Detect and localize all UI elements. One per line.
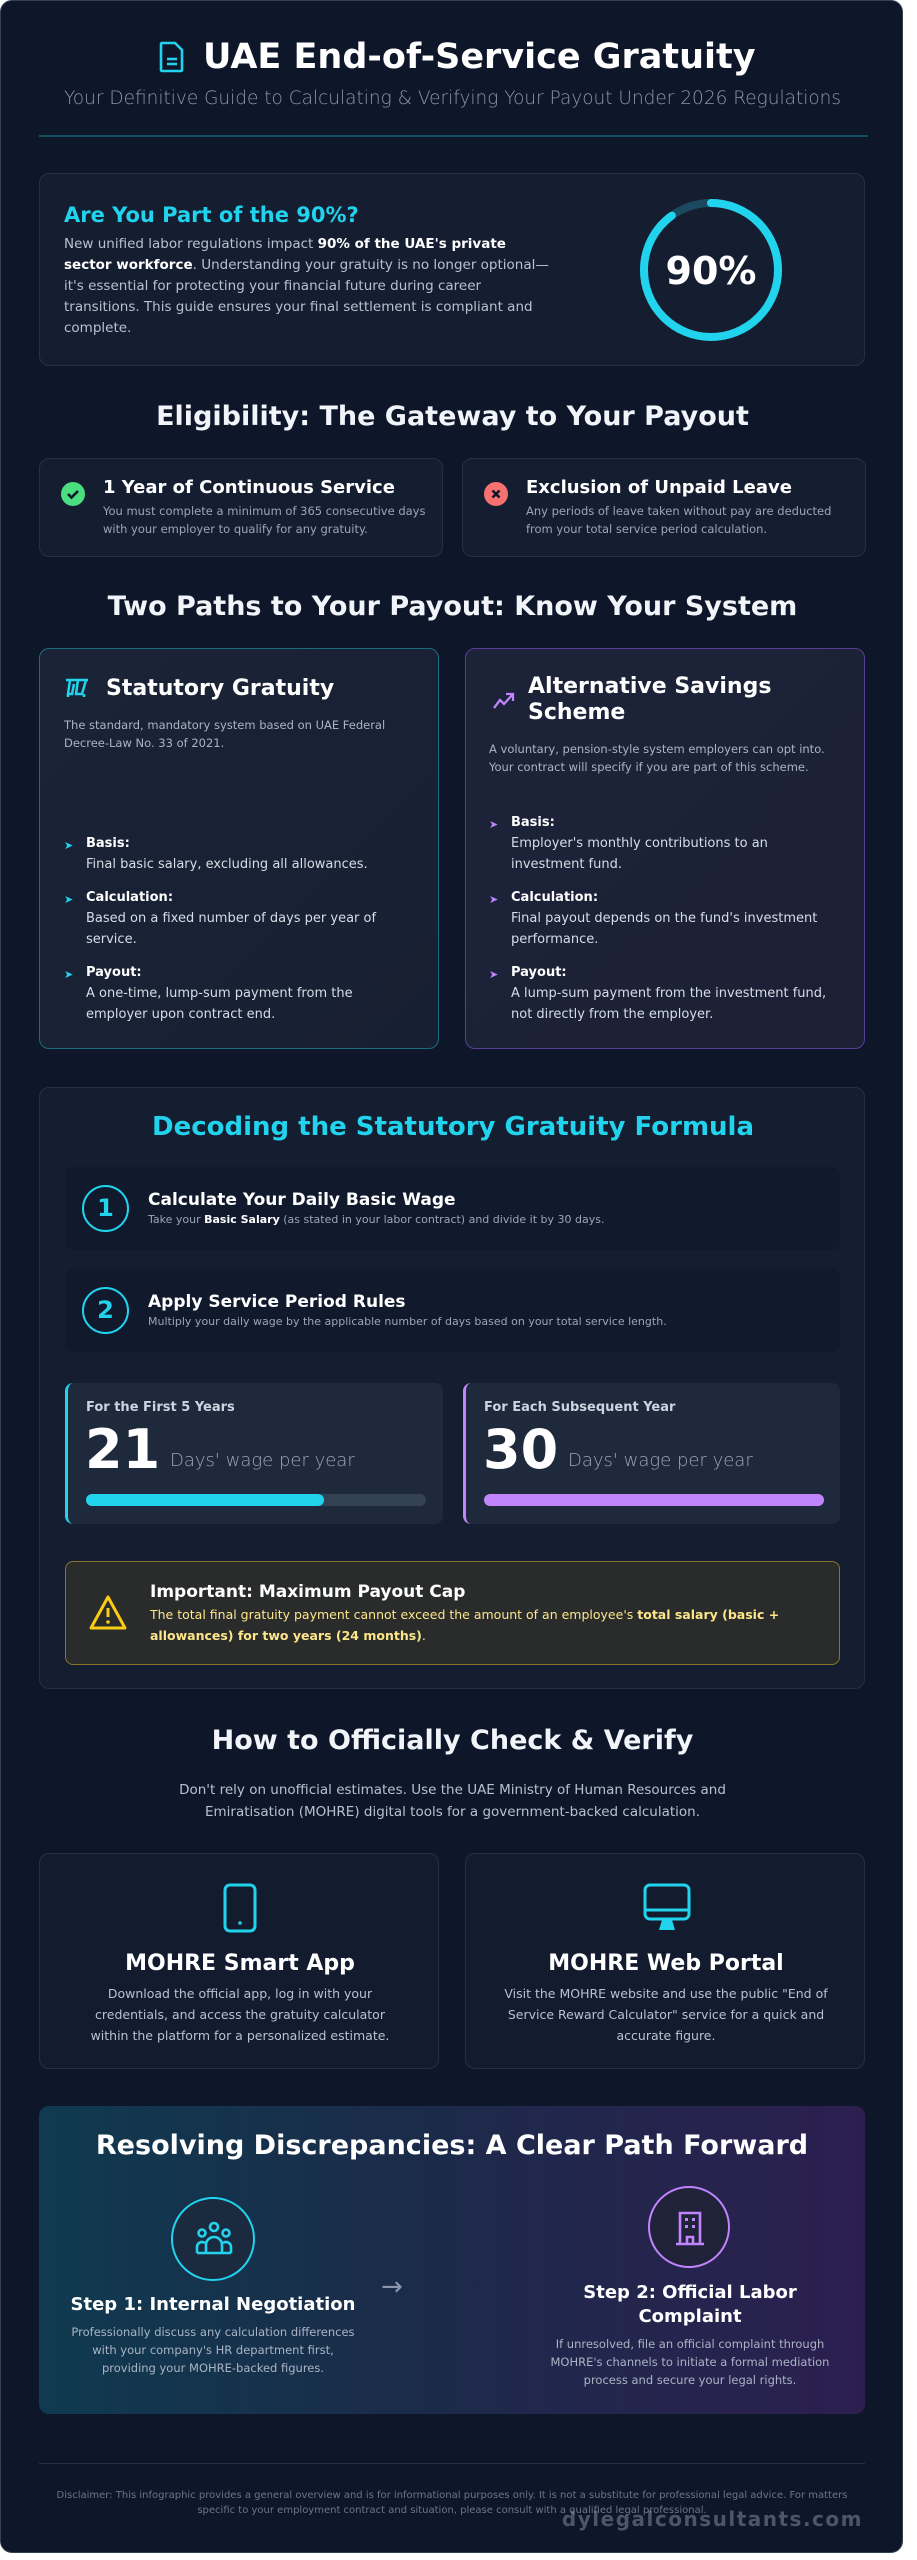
step 2: labor complaint (550, 2186, 829, 2387)
panel: web portal: MOHRE Web Portal (548, 1951, 784, 1976)
text: 90% description (64, 236, 549, 336)
step 2: 2 (97, 1296, 114, 1324)
panel: statutory gratuity: The standard, mandatory system based on UAE Federal Decree-Law No. 33 of 2021. (64, 718, 385, 750)
heading: are you part: Are You Part of the 90%? (64, 203, 359, 227)
step 1: negotiation: Step 1: Internal Negotiation (71, 2294, 355, 2315)
panel: smart app (39, 1853, 439, 2069)
card: first 5 years: For the First 5 Years (86, 1400, 235, 1415)
text: 90% description: sector workforce. Understanding your gratuity is no longer optional— (64, 257, 549, 273)
panel: statutory gratuity (39, 648, 439, 1049)
list: statutory points: A one-time, lump-sum payment from the employer upon contract end. (86, 986, 353, 1022)
text: check intro: Don't rely on unofficial estimates. Use the UAE Ministry of Human Resources and Emiratisation (MOHRE) digital tools for a government-backed calculation. (179, 1782, 726, 1820)
step 1: negotiation: Professionally discuss any calculation differences with your company's HR department first, providing your MOHRE-backed figures. (71, 2325, 355, 2375)
panel: 1 year service (39, 458, 443, 557)
list: statutory points: Based on a fixed number of days per year of service. (86, 911, 376, 947)
icon: people (171, 2197, 255, 2281)
panel: alternative savings (465, 648, 865, 1049)
step 2: Apply Service Period Rules (148, 1292, 406, 1312)
list: alternative points: Employer's monthly contributions to an investment fund. (511, 836, 768, 872)
panel: resolving discrepancies (39, 2106, 865, 2414)
callout: payout cap (65, 1561, 840, 1665)
list: statutory points: ➤ (64, 968, 73, 981)
panel: 1 year service: 1 Year of Continuous Service (103, 477, 395, 498)
watermark: dylegalconsultants.com (562, 2507, 863, 2531)
heading: two paths: Two Paths to Your Payout: Know Your System (108, 591, 797, 622)
step 1: Calculate Your Daily Basic Wage (148, 1190, 456, 1210)
step 2: labor complaint: Complaint (638, 2306, 742, 2327)
list: alternative points: ➤ (489, 893, 498, 906)
icon: warning (90, 1595, 127, 1630)
step 1 (65, 1167, 840, 1250)
title: UAE End-of-Service Gratuity (203, 37, 756, 77)
panel: statutory gratuity: Statutory Gratuity (106, 676, 334, 701)
list: alternative points: ➤ (489, 818, 498, 831)
list: statutory points (64, 836, 376, 1022)
panel: unpaid leave (462, 458, 866, 557)
step 2 (65, 1269, 840, 1352)
list: alternative points: Final payout depends on the fund's investment performance. (511, 911, 817, 947)
bar: 30 days (484, 1494, 824, 1506)
icon: money (66, 678, 88, 697)
list: statutory points: Basis: (86, 836, 130, 851)
callout: payout cap: The total final gratuity payment cannot exceed the amount of an employee's total salary (basic + allowances) for two years (24 months). (150, 1607, 779, 1643)
heading: eligibility: Eligibility: The Gateway to Your Payout (156, 401, 749, 432)
icon: building (648, 2186, 730, 2268)
card: subsequent years (463, 1383, 840, 1524)
list: alternative points (489, 815, 826, 1022)
chart: 90% ring (640, 199, 782, 341)
step 1: Take your Basic Salary (as stated in your labor contract) and divide it by 30 days. (148, 1213, 604, 1226)
text: disclaimer: Disclaimer: This infographic provides a general overview and is for informational purposes only. It is not a substitute for professional legal advice. For matters specific to your employment contract and situation, please consult with a qualified legal professional. (57, 2490, 847, 2516)
step 2: Multiply your daily wage by the applicable number of days based on your total service length. (148, 1315, 667, 1328)
text: 90% description: complete. (64, 320, 131, 336)
list: statutory points: Final basic salary, excluding all allowances. (86, 857, 368, 872)
list: statutory points: ➤ (64, 893, 73, 906)
panel: web portal (465, 1853, 865, 2069)
panel: alternative savings: Alternative Savings Scheme (528, 674, 771, 725)
icon: document (160, 42, 184, 72)
panel: web portal: Visit the MOHRE website and use the public "End of Service Reward Calculator" service for a quick and accurate figure. (504, 1986, 828, 2043)
text: 90% description: New unified labor regulations impact 90% of the UAE's private (64, 236, 506, 252)
step 1: 1 (97, 1194, 114, 1222)
icon: monitor (644, 1884, 690, 1930)
subtitle: Your Definitive Guide to Calculating & Verifying Your Payout Under 2026 Regulations (64, 88, 841, 109)
callout: payout cap: Important: Maximum Payout Cap (150, 1582, 465, 1602)
text: 90% description: transitions. This guide ensures your final settlement is compliant and (64, 299, 533, 315)
panel: smart app: MOHRE Smart App (125, 1951, 355, 1976)
list: statutory points: ➤ (64, 839, 73, 852)
panel: 90% (39, 173, 865, 366)
heading: resolving: Resolving Discrepancies: A Clear Path Forward (96, 2130, 808, 2161)
text: 90% description: it's essential for protecting your financial future during career (64, 278, 481, 294)
icon: phone (224, 1884, 256, 1932)
panel: formula (39, 1087, 865, 1689)
icon: check (61, 482, 85, 506)
list: alternative points: ➤ (489, 968, 498, 981)
heading: check & verify: How to Officially Check & Verify (212, 1725, 693, 1756)
card: subsequent years: 30 (483, 1418, 558, 1481)
list: alternative points: Calculation: (511, 890, 598, 905)
icon: trend up (493, 692, 514, 709)
list: alternative points: Payout: (511, 965, 567, 980)
panel: smart app: Download the official app, log in with your credentials, and access the gratuity calculator within the platform for a personalized estimate. (91, 1986, 389, 2043)
list: alternative points: Basis: (511, 815, 555, 830)
arrow: → (381, 2272, 403, 2302)
card: subsequent years: For Each Subsequent Year (484, 1400, 675, 1415)
card: first 5 years: Days' wage per year (170, 1450, 355, 1471)
icon: cross (484, 482, 508, 506)
bar: 21 days (86, 1494, 426, 1506)
list: statutory points: Payout: (86, 965, 142, 980)
panel: unpaid leave: Exclusion of Unpaid Leave (526, 477, 792, 498)
panel: unpaid leave: Any periods of leave taken without pay are deducted from your total service period calculation. (526, 504, 831, 536)
step 2: labor complaint: If unresolved, file an official complaint through MOHRE's channels to initiate a formal mediation process and secure your legal rights. (550, 2337, 829, 2387)
card: first 5 years: 21 (85, 1418, 160, 1481)
step 1: negotiation (71, 2197, 355, 2375)
step 2: labor complaint: Step 2: Official Labor (583, 2282, 797, 2303)
card: subsequent years: Days' wage per year (568, 1450, 753, 1471)
card: first 5 years (65, 1383, 443, 1524)
list: statutory points: Calculation: (86, 890, 173, 905)
list: alternative points: A lump-sum payment from the investment fund, not directly from the employer. (511, 986, 826, 1022)
heading: decoding: Decoding the Statutory Gratuity Formula (152, 1112, 754, 1142)
chart: 90% ring: 90% (666, 249, 756, 293)
panel: alternative savings: A voluntary, pension-style system employers can opt into. Your contract will specify if you are part of this scheme. (489, 742, 825, 774)
panel: 1 year service: You must complete a minimum of 365 consecutive days with your employer to qualify for any gratuity. (103, 504, 425, 536)
